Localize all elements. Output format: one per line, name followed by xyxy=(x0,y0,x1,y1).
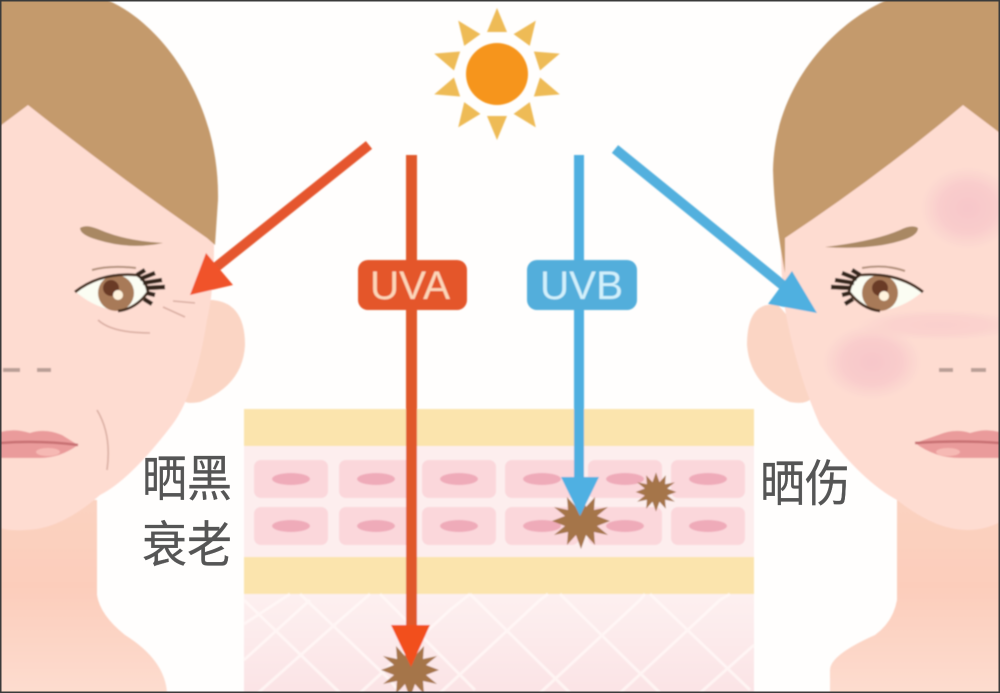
text: tanning and ageing xyxy=(142,452,232,574)
panel: right sunburned face xyxy=(747,0,1000,693)
eyebrow xyxy=(80,226,163,246)
dark spot: UVB deep xyxy=(552,493,610,549)
nose marks xyxy=(939,368,986,372)
label: UVB: UVB xyxy=(540,264,623,308)
ear xyxy=(747,304,812,403)
hair xyxy=(773,0,1000,273)
face xyxy=(0,100,214,530)
ear xyxy=(181,300,245,403)
lips xyxy=(0,430,78,458)
dark spot: UVA dermis xyxy=(381,642,439,693)
label: UVA: UVA xyxy=(370,264,450,308)
arrow: UVB to right face xyxy=(615,149,817,313)
redness patches xyxy=(822,166,1000,400)
label: UVB xyxy=(527,260,637,310)
eye xyxy=(831,267,923,311)
hair xyxy=(0,0,218,245)
arrow: UVA to left face xyxy=(190,145,369,295)
label: UVA xyxy=(358,260,467,310)
eye xyxy=(75,267,165,311)
lips xyxy=(915,430,1000,458)
nose marks xyxy=(3,368,51,372)
neck xyxy=(830,500,1000,693)
dark spot: UVB side small xyxy=(636,472,676,512)
skin cross-section diagram xyxy=(244,409,754,693)
bottom yellow layer xyxy=(244,557,754,594)
arrow: UVB down to epidermis xyxy=(561,155,599,516)
panel: left aged face xyxy=(0,0,245,693)
skin cells xyxy=(254,460,745,545)
text: tanning and ageing: 衰老 xyxy=(142,518,232,574)
icon: sun xyxy=(431,8,563,140)
dermis with collagen mesh xyxy=(244,594,754,693)
top yellow layer xyxy=(244,409,754,446)
eyebrow xyxy=(825,226,918,248)
neck xyxy=(0,500,167,693)
text: sunburn: 晒伤 xyxy=(760,457,850,513)
text: tanning and ageing: 晒黑 xyxy=(142,452,232,508)
arrow: UVA down to dermis xyxy=(391,155,430,667)
epidermis band xyxy=(244,415,754,565)
face xyxy=(781,100,1000,530)
wrinkles xyxy=(97,301,195,470)
